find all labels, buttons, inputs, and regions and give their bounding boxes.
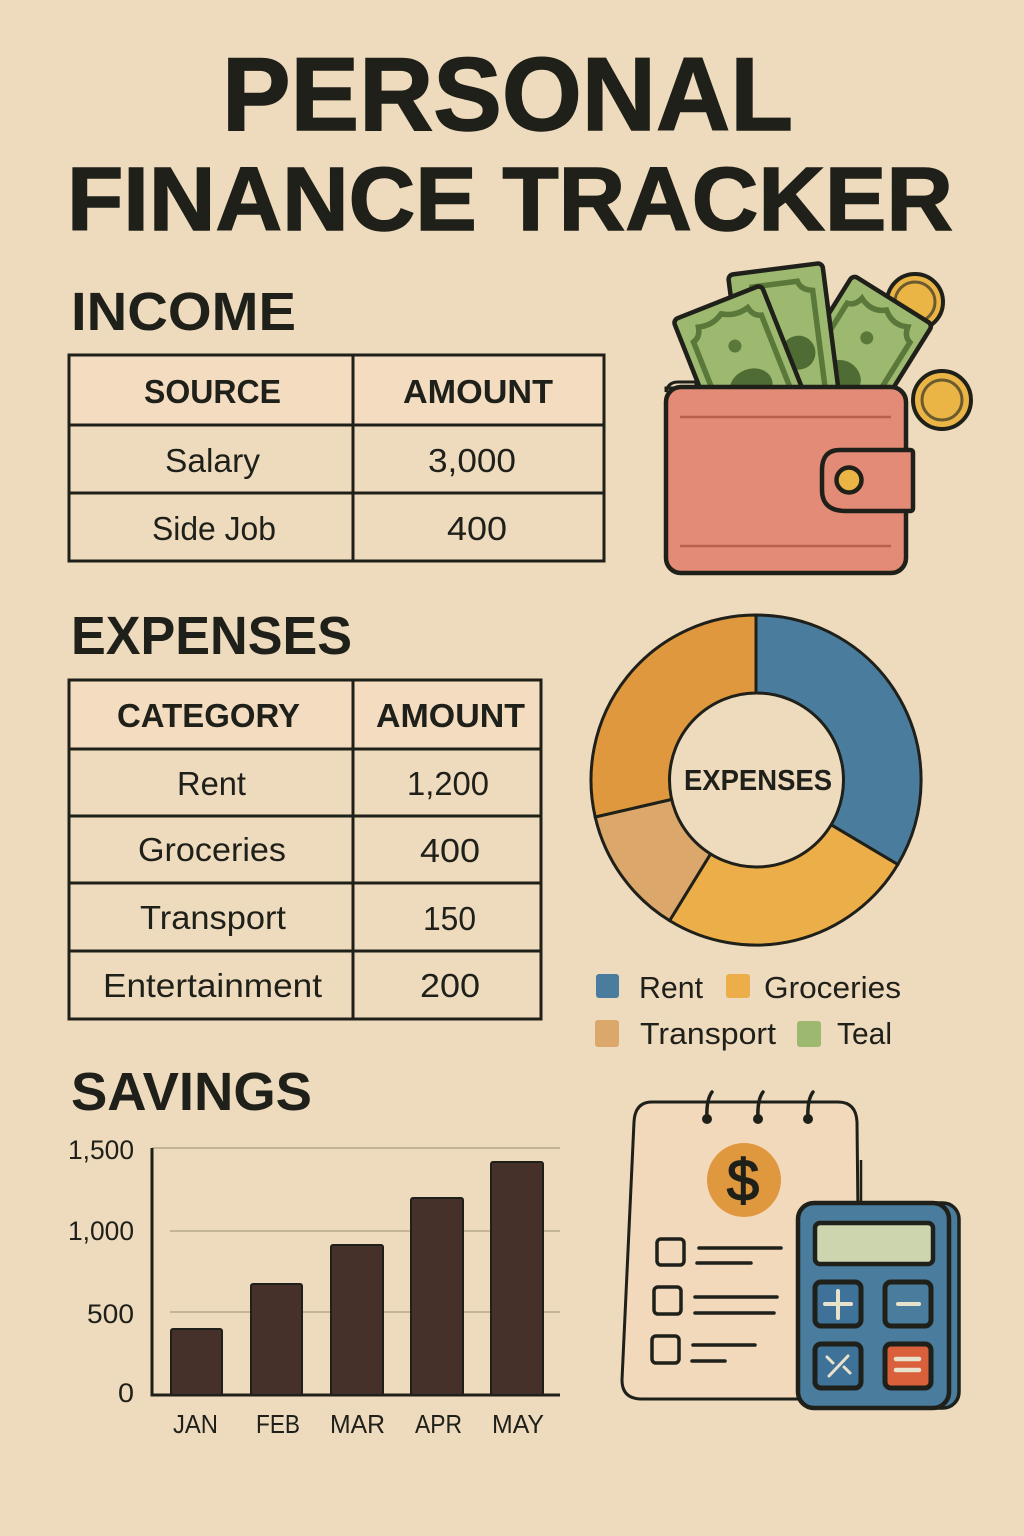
legend: Rent	[639, 970, 703, 1005]
bar chart: savings: 1,500	[68, 1135, 134, 1165]
title: PERSONAL	[222, 37, 793, 153]
table: income: Salary	[165, 442, 260, 479]
notebook rings	[702, 1092, 813, 1124]
icon: wallet with money	[666, 263, 971, 573]
heading: savings: SAVINGS	[71, 1062, 312, 1122]
dollar badge	[707, 1143, 781, 1217]
table: expenses: 200	[420, 967, 480, 1004]
icon: banknotes	[672, 261, 934, 386]
table: expenses	[69, 680, 541, 1019]
table: expenses: Groceries	[138, 831, 286, 868]
heading: income: INCOME	[71, 282, 296, 342]
bar chart: savings: APR	[415, 1409, 462, 1439]
calculator screen	[815, 1223, 933, 1264]
donut chart: expenses	[591, 615, 921, 945]
bar chart: savings: MAY	[492, 1409, 544, 1439]
legend	[595, 970, 901, 1051]
icon: calculator	[798, 1203, 959, 1408]
bar chart: savings: JAN	[173, 1409, 218, 1439]
checklist	[652, 1239, 781, 1363]
wallet body	[666, 387, 906, 573]
wallet back flap	[666, 382, 696, 392]
table: expenses: 400	[420, 832, 480, 869]
table: expenses: 1,200	[407, 765, 489, 802]
button: plus	[815, 1282, 861, 1326]
wallet clasp	[822, 450, 913, 511]
table: income: AMOUNT	[403, 373, 553, 410]
title	[67, 37, 953, 250]
table: income: SOURCE	[144, 373, 281, 410]
bar chart: savings	[68, 1135, 560, 1439]
title: FINANCE TRACKER	[67, 150, 953, 250]
table: expenses: CATEGORY	[117, 697, 300, 734]
table: income	[69, 355, 604, 561]
bar chart: savings: MAR	[330, 1409, 385, 1439]
table: expenses: 150	[423, 900, 476, 937]
donut chart: expenses: EXPENSES	[684, 765, 832, 797]
bar chart: savings: FEB	[256, 1409, 300, 1439]
button: minus	[885, 1282, 931, 1326]
bar chart: savings: 0	[118, 1378, 134, 1408]
icon: coin behind bills	[887, 274, 943, 330]
legend: Transport	[640, 1016, 776, 1051]
icon: budget notebook	[622, 1092, 861, 1399]
button: equals	[885, 1344, 931, 1388]
bar chart: savings: 1,000	[68, 1216, 134, 1246]
dollar badge: $	[727, 1148, 759, 1213]
table: expenses: Rent	[177, 765, 246, 802]
table: income: Side Job	[152, 510, 276, 547]
table: income: 3,000	[428, 442, 516, 479]
icon: loose coin	[913, 371, 971, 429]
legend: Groceries	[764, 970, 901, 1005]
table: expenses: Entertainment	[103, 967, 322, 1004]
button: percent	[815, 1344, 861, 1388]
table: expenses: AMOUNT	[376, 697, 525, 734]
legend: Teal	[837, 1016, 892, 1051]
table: income: 400	[447, 510, 507, 547]
table: expenses: Transport	[140, 899, 286, 936]
heading: expenses: EXPENSES	[71, 606, 352, 666]
bar chart: savings: 500	[87, 1299, 134, 1329]
